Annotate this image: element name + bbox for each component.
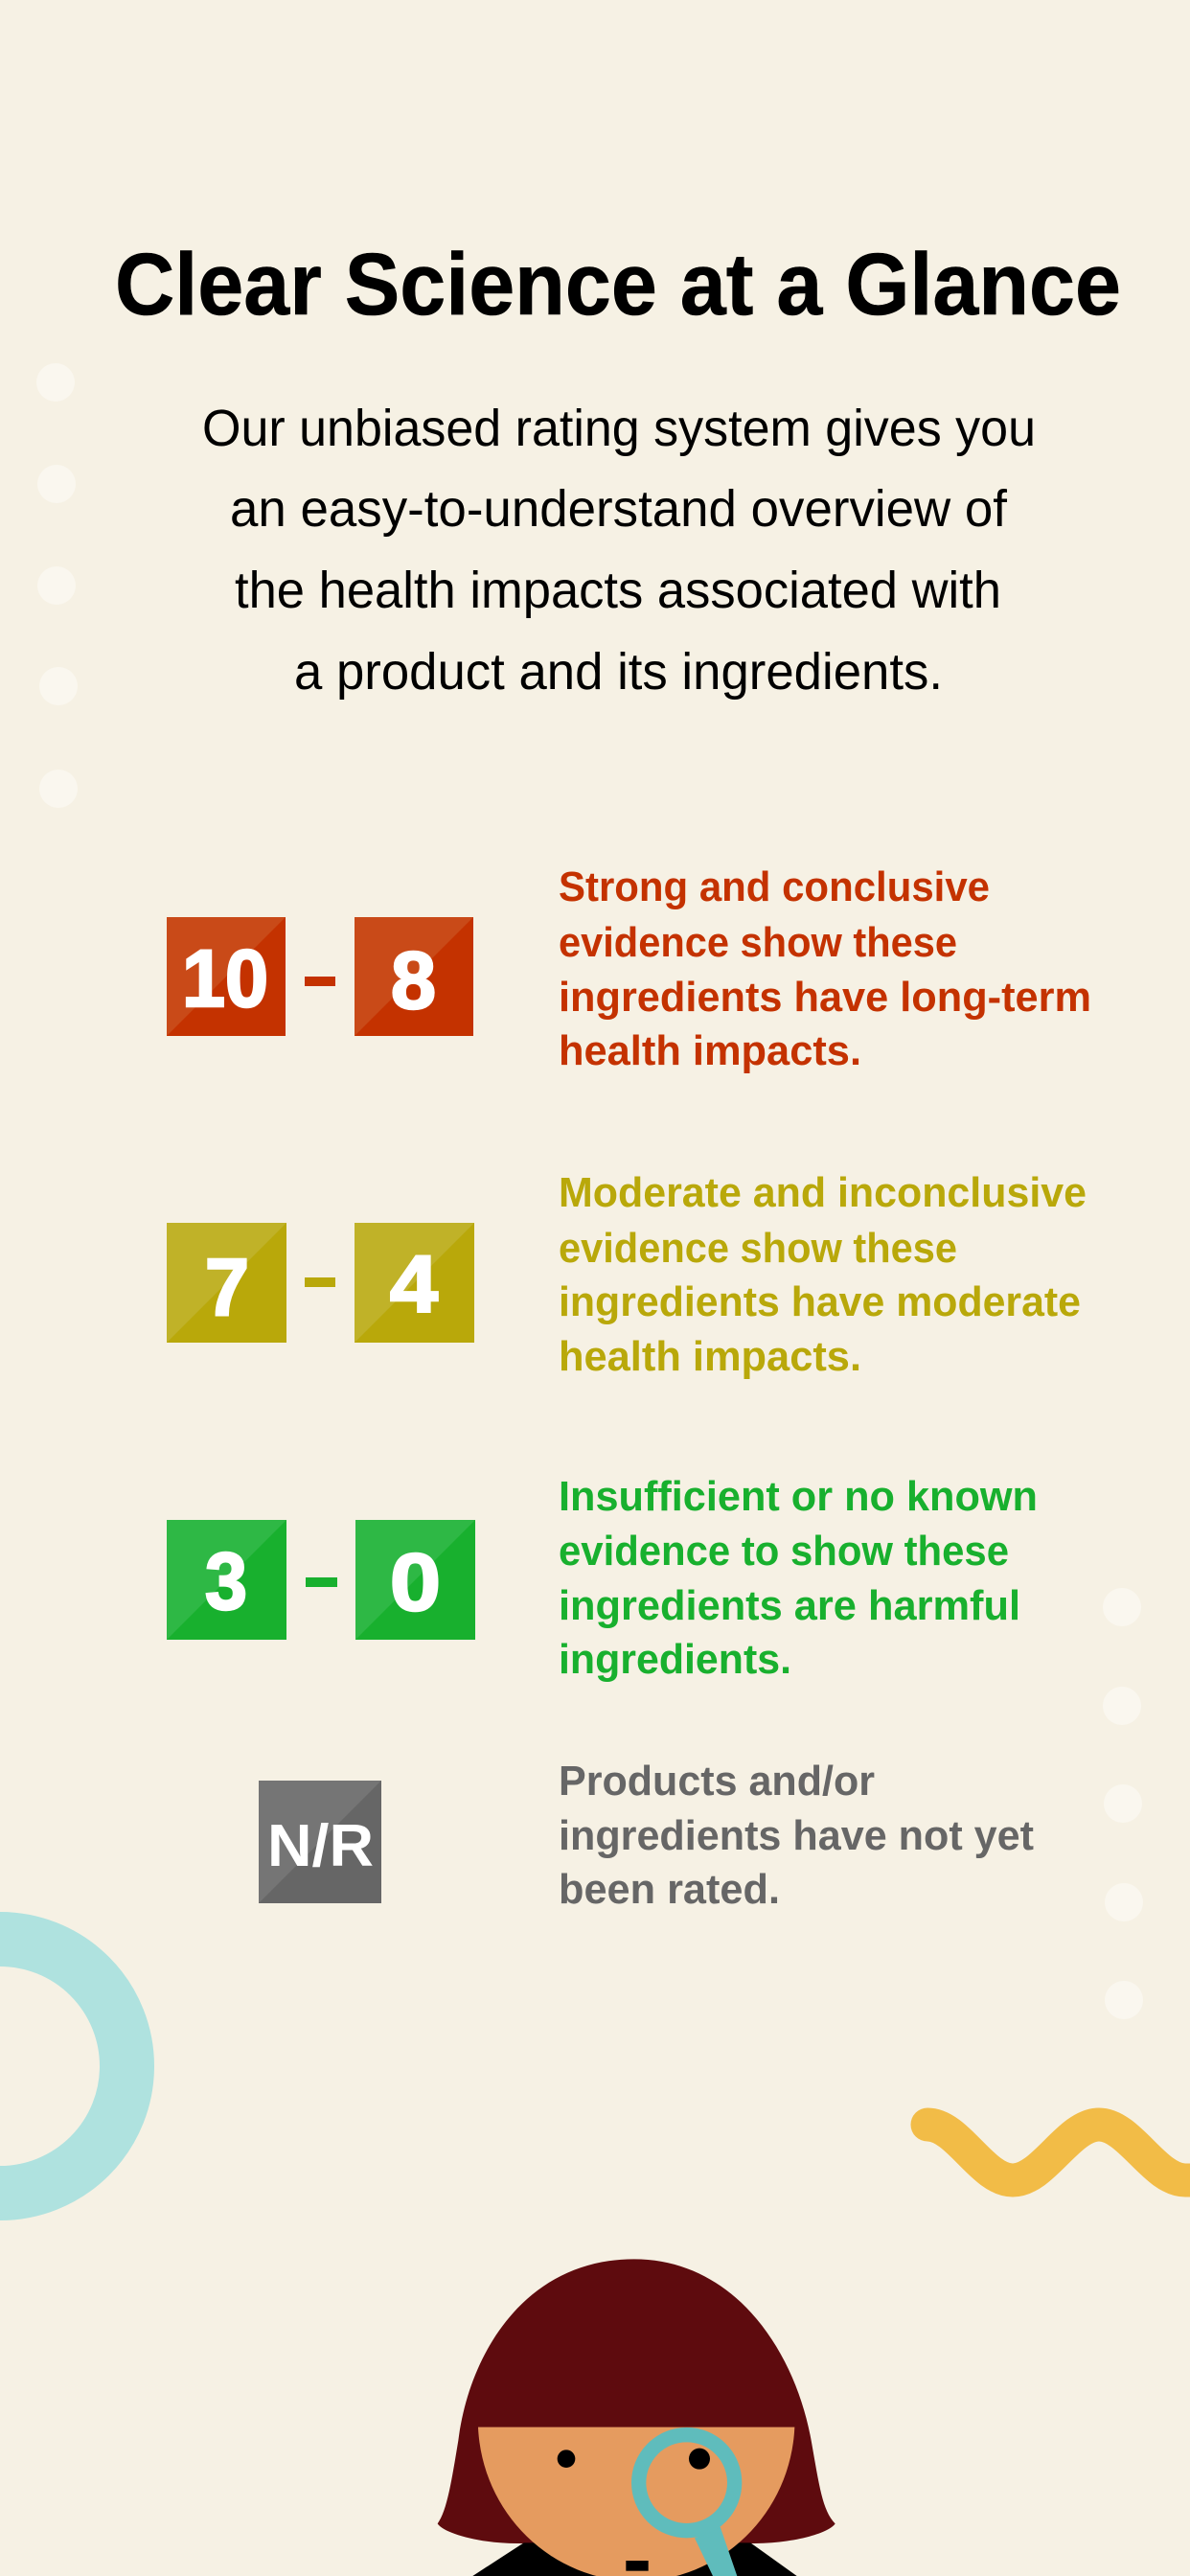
rating badge: 10 - 8: 10 bbox=[182, 933, 268, 1024]
description: insufficient evidence: Insufficient or no known bbox=[559, 1473, 1038, 1520]
description: insufficient evidence bbox=[559, 1473, 1038, 1683]
description: strong evidence: health impacts. bbox=[559, 1027, 861, 1074]
description: strong evidence: ingredients have long-term bbox=[559, 974, 1091, 1021]
description: insufficient evidence: ingredients are harmful bbox=[559, 1582, 1020, 1629]
description: moderate evidence: evidence show these bbox=[559, 1225, 957, 1272]
intro paragraph: an easy-to-understand overview of bbox=[230, 480, 1008, 538]
hair bbox=[438, 2259, 835, 2543]
right eye bbox=[689, 2449, 710, 2470]
description: not rated: Products and/or bbox=[559, 1758, 875, 1805]
decorative dots: left column bbox=[36, 363, 78, 808]
decorative yellow wave bbox=[927, 2125, 1190, 2180]
title: Clear Science at a Glance bbox=[115, 236, 1121, 334]
rating badge: 7 - 4 bbox=[167, 1223, 474, 1343]
description: not rated: been rated. bbox=[559, 1866, 780, 1913]
intro paragraph: Our unbiased rating system gives you bbox=[202, 400, 1036, 457]
description: insufficient evidence: ingredients. bbox=[559, 1636, 791, 1683]
rating badge: 7 - 4: 7 bbox=[205, 1242, 249, 1332]
mouth bbox=[626, 2561, 649, 2571]
description: moderate evidence: ingredients have moderate bbox=[559, 1278, 1081, 1325]
body bbox=[472, 2542, 797, 2576]
rating badge: 10 - 8: 8 bbox=[391, 935, 436, 1025]
description: moderate evidence: health impacts. bbox=[559, 1333, 861, 1380]
rating badge: 7 - 4: 4 bbox=[390, 1239, 438, 1329]
description: moderate evidence: Moderate and inconclusive bbox=[559, 1169, 1087, 1216]
rating badge: N/R bbox=[259, 1781, 381, 1903]
rating badge: 3 - 0 bbox=[167, 1520, 475, 1640]
face bbox=[478, 2427, 794, 2576]
rating badge: 3 - 0: 3 bbox=[205, 1536, 247, 1626]
rating badge: 10 - 8 bbox=[167, 917, 473, 1036]
decorative ring bbox=[0, 1940, 126, 2193]
description: strong evidence bbox=[559, 863, 1091, 1074]
left eye bbox=[558, 2450, 575, 2468]
description: insufficient evidence: evidence to show these bbox=[559, 1528, 1009, 1575]
description: moderate evidence bbox=[559, 1169, 1087, 1380]
intro paragraph bbox=[202, 400, 1036, 701]
decorative dots: right column bbox=[1103, 1588, 1143, 2019]
magnifying glass bbox=[639, 2435, 737, 2576]
description: strong evidence: Strong and conclusive bbox=[559, 863, 990, 910]
intro paragraph: the health impacts associated with bbox=[235, 562, 1001, 619]
description: strong evidence: evidence show these bbox=[559, 919, 957, 966]
description: not rated: ingredients have not yet bbox=[559, 1812, 1034, 1859]
rating badge: N/R: N/R bbox=[267, 1813, 374, 1879]
description: not rated bbox=[559, 1758, 1034, 1913]
rating badge: 3 - 0: 0 bbox=[390, 1537, 441, 1627]
character with magnifying glass bbox=[438, 2259, 835, 2576]
intro paragraph: a product and its ingredients. bbox=[294, 643, 943, 701]
